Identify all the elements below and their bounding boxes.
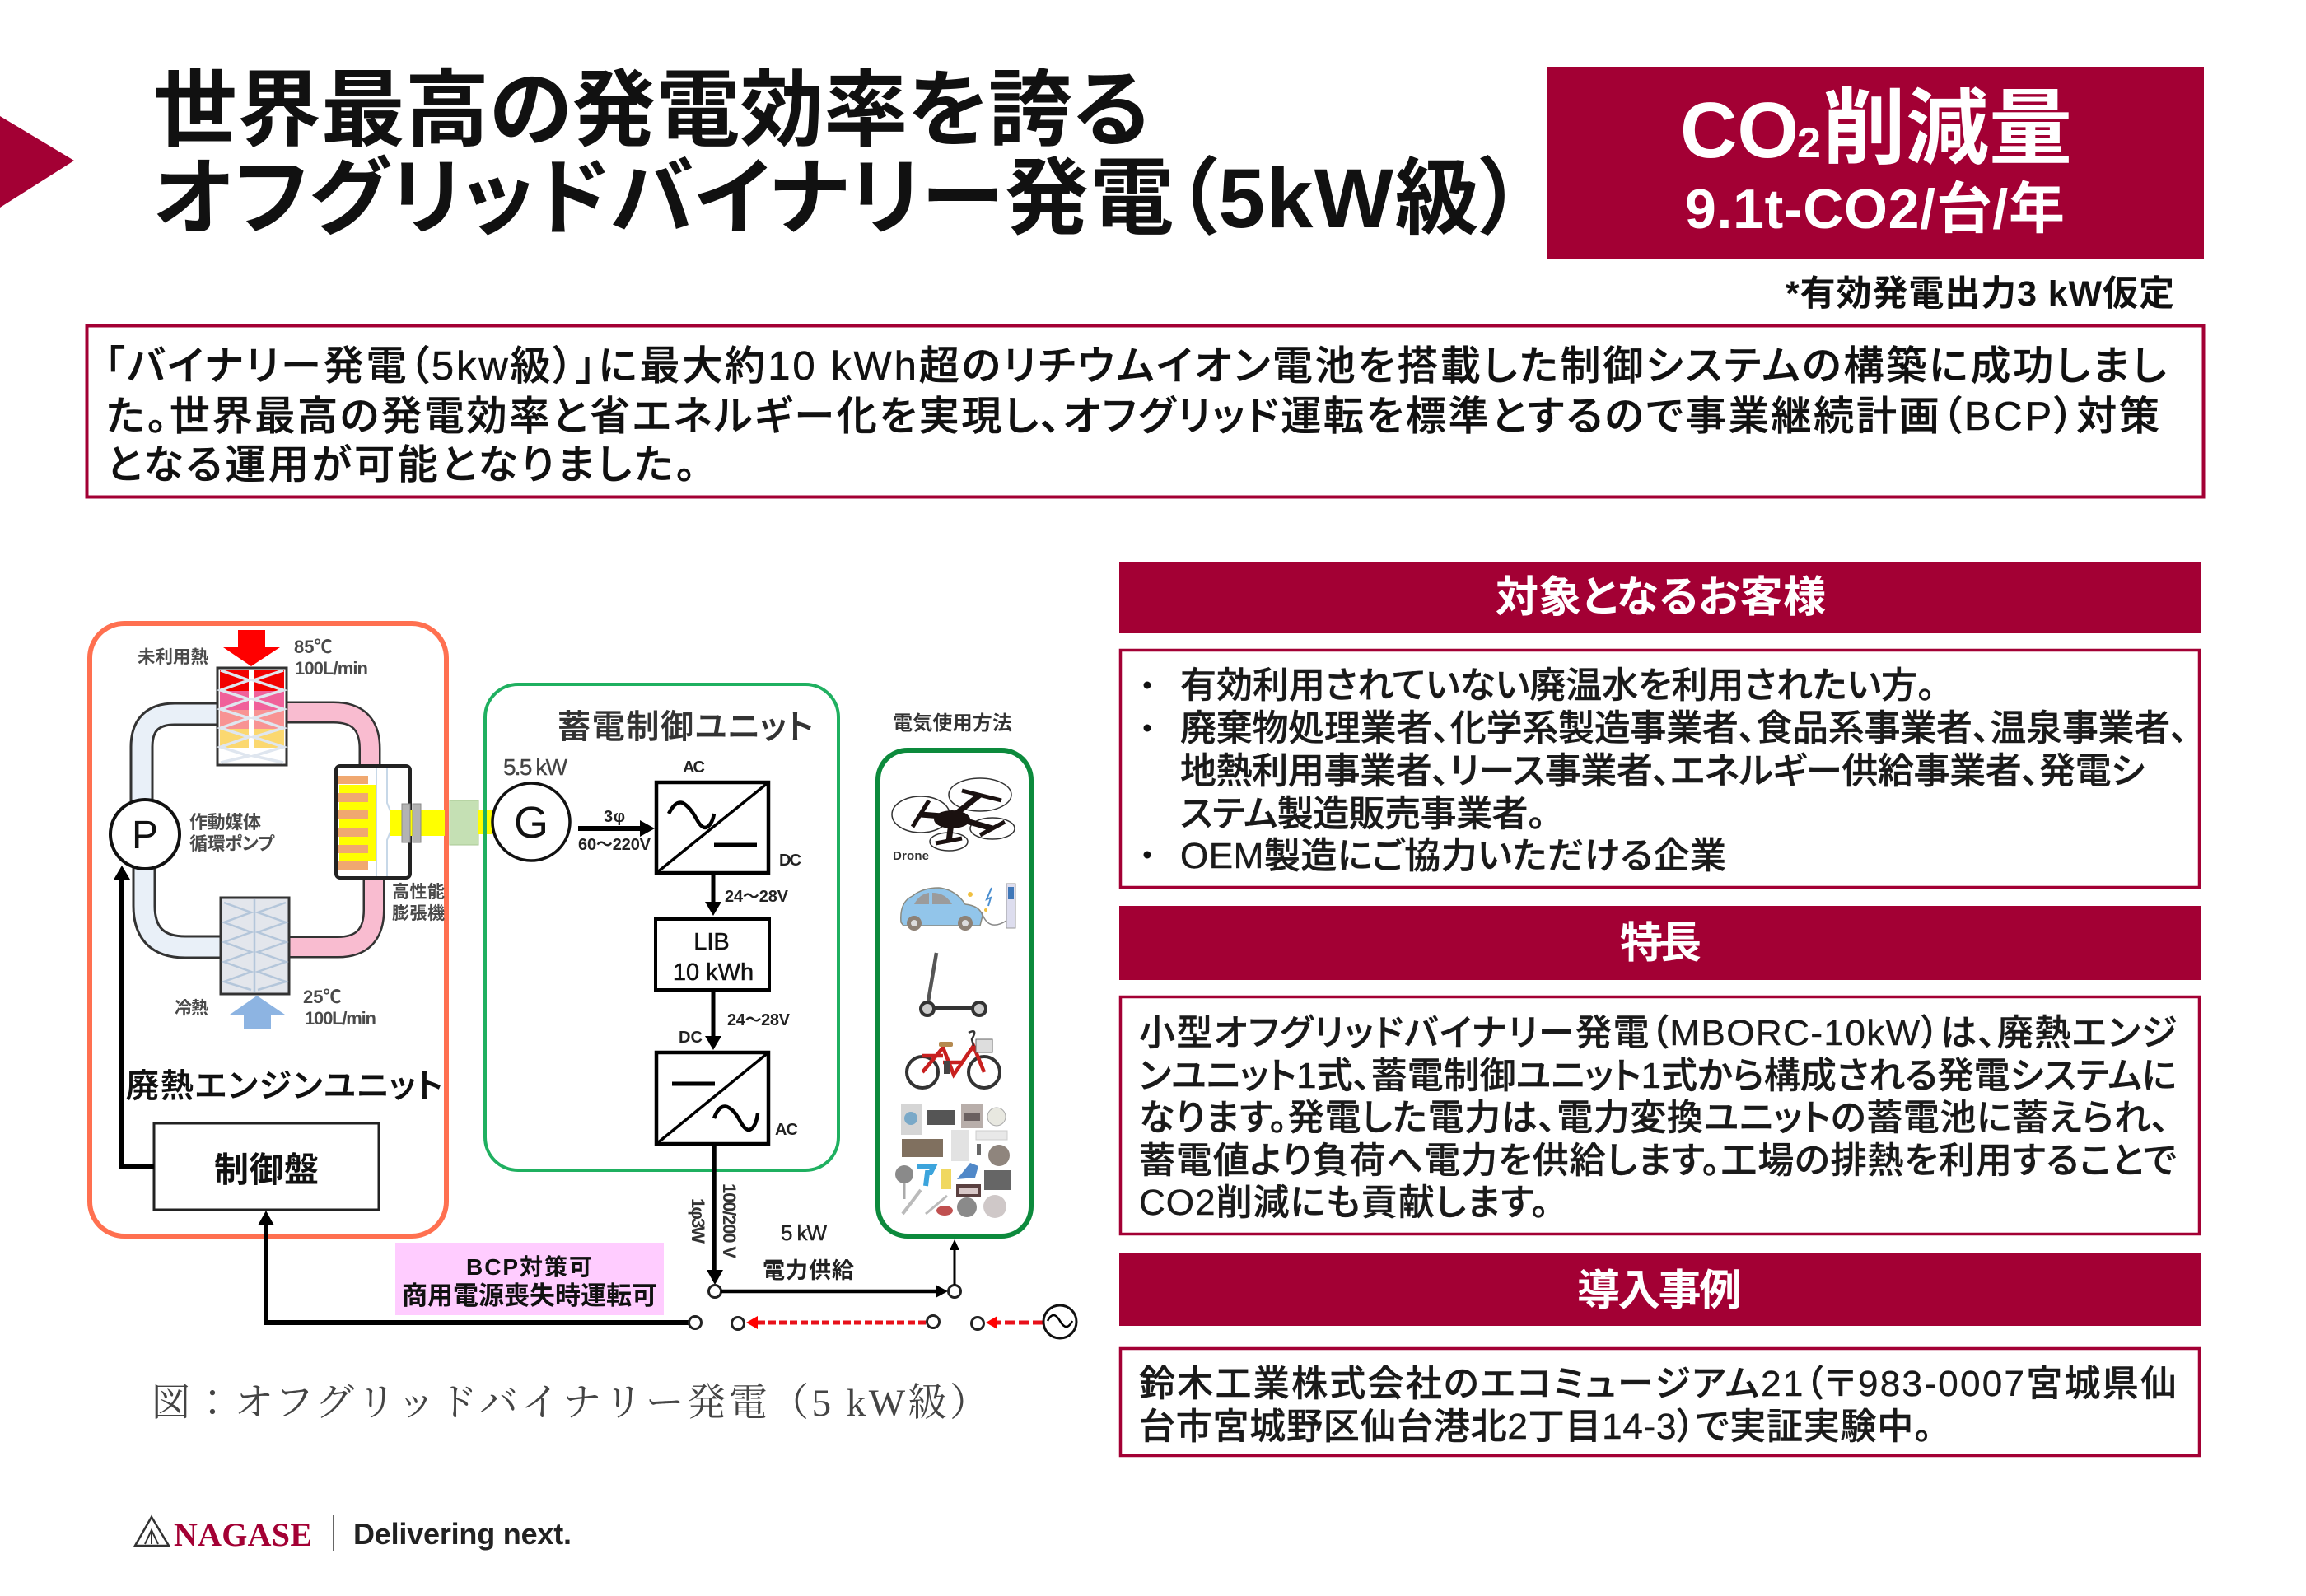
panel: case study: 台市宮城野区仙台港北2丁目14-3）で実証実験中。 — [1139, 1407, 1932, 1447]
icon: AC source — [1043, 1305, 1076, 1338]
label: cold flow: 25℃ — [303, 987, 341, 1007]
unit heading: 廃熱エンジンユニット — [126, 1068, 442, 1104]
label: phase: 1φ3W — [688, 1198, 708, 1244]
battery LIB: LIB — [693, 929, 730, 955]
icon: electric car — [901, 884, 1015, 931]
panel: CO2 reduction: 削減量 — [1823, 83, 2072, 175]
icon: kick scooter — [921, 953, 986, 1015]
working fluid piping — [142, 712, 374, 947]
label: voltage: 100/200 V — [719, 1183, 740, 1258]
arrow: AC output down — [707, 1144, 723, 1285]
DC/AC inverter — [656, 1052, 798, 1144]
panel: case study — [1120, 1349, 2199, 1456]
panel: CO2 reduction: 9.1t-CO2/台/年 — [1685, 178, 2065, 240]
panel: features: 小型オフグリッドバイナリー発電（MBORC-10kW）は、廃熱エンジ — [1139, 1013, 2177, 1053]
arrow: control to pump — [114, 866, 154, 1167]
panel: target customers: OEM製造にご協力いただける企業 — [1180, 836, 1726, 876]
figure caption: 図：オフグリッドバイナリー発電（5 kW級） — [152, 1382, 988, 1425]
heat exchanger (cold) — [221, 898, 289, 994]
label: pump: 作動媒体 — [189, 812, 261, 833]
panel: features: なります。発電した電力は、電力変換ユニットの蓄電池に蓄えられ、 — [1139, 1098, 2169, 1138]
AC/DC converter — [656, 758, 801, 873]
title: 世界最高の発電効率を誇る — [153, 63, 1150, 157]
unit heading: 蓄電制御ユニット — [558, 709, 813, 745]
label: power supply: 電力供給 — [763, 1258, 854, 1283]
logo: NAGASE: NAGASE — [174, 1516, 312, 1553]
arrow: grid source dashed — [972, 1316, 1043, 1329]
panel: case study: 鈴木工業株式会社のエコミュージアム21（〒983-0007宮城県仙 — [1139, 1364, 2177, 1404]
label: expander — [392, 883, 445, 923]
icon: generator — [492, 783, 570, 861]
arrow: generator to converter: 60～220V — [578, 836, 651, 854]
AC/DC converter: AC — [683, 758, 705, 777]
panel: electricity uses — [878, 750, 1031, 1236]
arrow: battery to inverter: DC — [679, 1029, 703, 1047]
icon: home appliances — [895, 1104, 1011, 1218]
icon: electric bicycle — [907, 1031, 1000, 1088]
title — [153, 63, 1522, 245]
label: waste heat: 未利用熱 — [138, 647, 208, 667]
coupling shaft — [450, 800, 492, 845]
label: expander: 高性能 — [392, 883, 445, 902]
panel: description: た。世界最高の発電効率と省エネルギー化を実現し、オフグリッド運転を標準とするので事業継続計画（BCP）対策 — [106, 394, 2159, 439]
label: pump — [189, 812, 275, 854]
panel: features: 蓄電値より負荷へ電力を供給します。工場の排熱を利用することで — [1139, 1141, 2177, 1181]
DC/AC inverter: AC — [775, 1121, 798, 1139]
icon: header arrow — [0, 116, 74, 208]
label: pump: 循環ポンプ — [189, 833, 275, 854]
logo: NAGASE: Delivering next. — [353, 1517, 572, 1551]
icon: blue cooling arrow — [230, 996, 285, 1029]
panel: features: CO2削減にも貢献します。 — [1139, 1183, 1549, 1223]
label: cooling: 冷熱 — [175, 999, 208, 1018]
icon: drone: Drone — [893, 849, 929, 863]
title: オフグリッドバイナリー発電（5kW級） — [153, 152, 1522, 245]
panel: description — [87, 326, 2204, 497]
label: hot flow: 100L/min — [295, 658, 368, 679]
arrow: generator to converter — [578, 808, 655, 854]
panel: features — [1120, 996, 2199, 1234]
label: cold flow: 100L/min — [305, 1008, 376, 1029]
panel: waste heat engine unit — [90, 623, 446, 1236]
panel: CO2 reduction — [1547, 67, 2204, 259]
panel: target customers: 有効利用されていない廃温水を利用されたい方。 — [1180, 665, 1935, 706]
icon: logo triangle — [135, 1517, 169, 1546]
logo: NAGASE — [135, 1515, 572, 1553]
heading: electricity uses: 電気使用方法 — [893, 712, 1012, 735]
panel: target customers: 廃棄物処理業者、化学系製造事業者、食品系事業者、温泉事業者、 — [1180, 708, 2188, 749]
panel heading: features: 特長 — [1620, 920, 1701, 968]
icon: drone — [892, 778, 1015, 863]
unit outline — [90, 623, 446, 1236]
label: expander: 膨張機 — [392, 904, 445, 923]
footnote: *有効発電出力3 kW仮定 — [1786, 274, 2174, 314]
panel heading: target customers — [1119, 562, 2201, 633]
panel: storage control unit — [485, 684, 838, 1170]
panel heading: target customers: 対象となるお客様 — [1496, 574, 1826, 622]
panel heading: features — [1119, 906, 2201, 980]
callout: BCP: 商用電源喪失時運転可 — [402, 1281, 657, 1310]
unit outline — [485, 684, 838, 1170]
arrow: grid backup dashed — [731, 1316, 939, 1329]
expander — [336, 766, 445, 878]
icon: pump: P — [132, 814, 158, 857]
panel: description: 「バイナリー発電（5kw級）」に最大約10 kWh超のリチウムイオン電池を搭載した制御システムの構築に成功しまし — [105, 344, 2166, 389]
label: hot flow — [294, 637, 368, 679]
panel: target customers: 地熱利用事業者、リース事業者、エネルギー供給事業者、発電シ — [1180, 751, 2145, 791]
panel: description: となる運用が可能となりました。 — [106, 443, 696, 488]
control panel — [154, 1123, 379, 1210]
arrow: converter to battery — [705, 873, 789, 916]
panel heading: case study — [1119, 1253, 2201, 1326]
battery LIB: 10 kWh — [673, 959, 754, 986]
arrow: power supply to uses — [708, 1239, 960, 1298]
label: 5 kW: 5 kW — [781, 1220, 827, 1245]
AC/DC converter: DC — [779, 852, 801, 870]
panel heading: case study: 導入事例 — [1577, 1267, 1742, 1315]
label: cold flow — [303, 987, 376, 1029]
battery LIB — [656, 919, 769, 990]
icon: generator: G — [514, 798, 548, 847]
icon: pump — [110, 800, 180, 869]
arrow: battery to inverter: 24～28V — [727, 1011, 791, 1029]
arrow: generator to converter: 3φ — [604, 808, 625, 826]
panel: CO2 reduction: CO — [1680, 86, 1799, 175]
arrow: converter to battery: 24～28V — [725, 888, 789, 906]
label: hot flow: 85℃ — [294, 637, 332, 657]
arrow: battery to inverter — [679, 990, 791, 1050]
callout: BCP — [395, 1243, 664, 1315]
panel: CO2 reduction: 2 — [1797, 119, 1821, 167]
panel: features: ンユニット1式、蓄電制御ユニット1式から構成される発電システムに — [1139, 1056, 2177, 1096]
callout: BCP: BCP対策可 — [466, 1254, 592, 1280]
control panel: 制御盤 — [214, 1150, 319, 1189]
panel: target customers — [1120, 651, 2199, 888]
heat exchanger (hot) — [217, 668, 287, 765]
panel: target customers: ステム製造販売事業者。 — [1180, 794, 1546, 834]
arrow: signal to control panel — [258, 1211, 702, 1329]
icon: red heat arrow — [223, 630, 280, 666]
label: generator output: 5.5 kW — [503, 754, 568, 780]
